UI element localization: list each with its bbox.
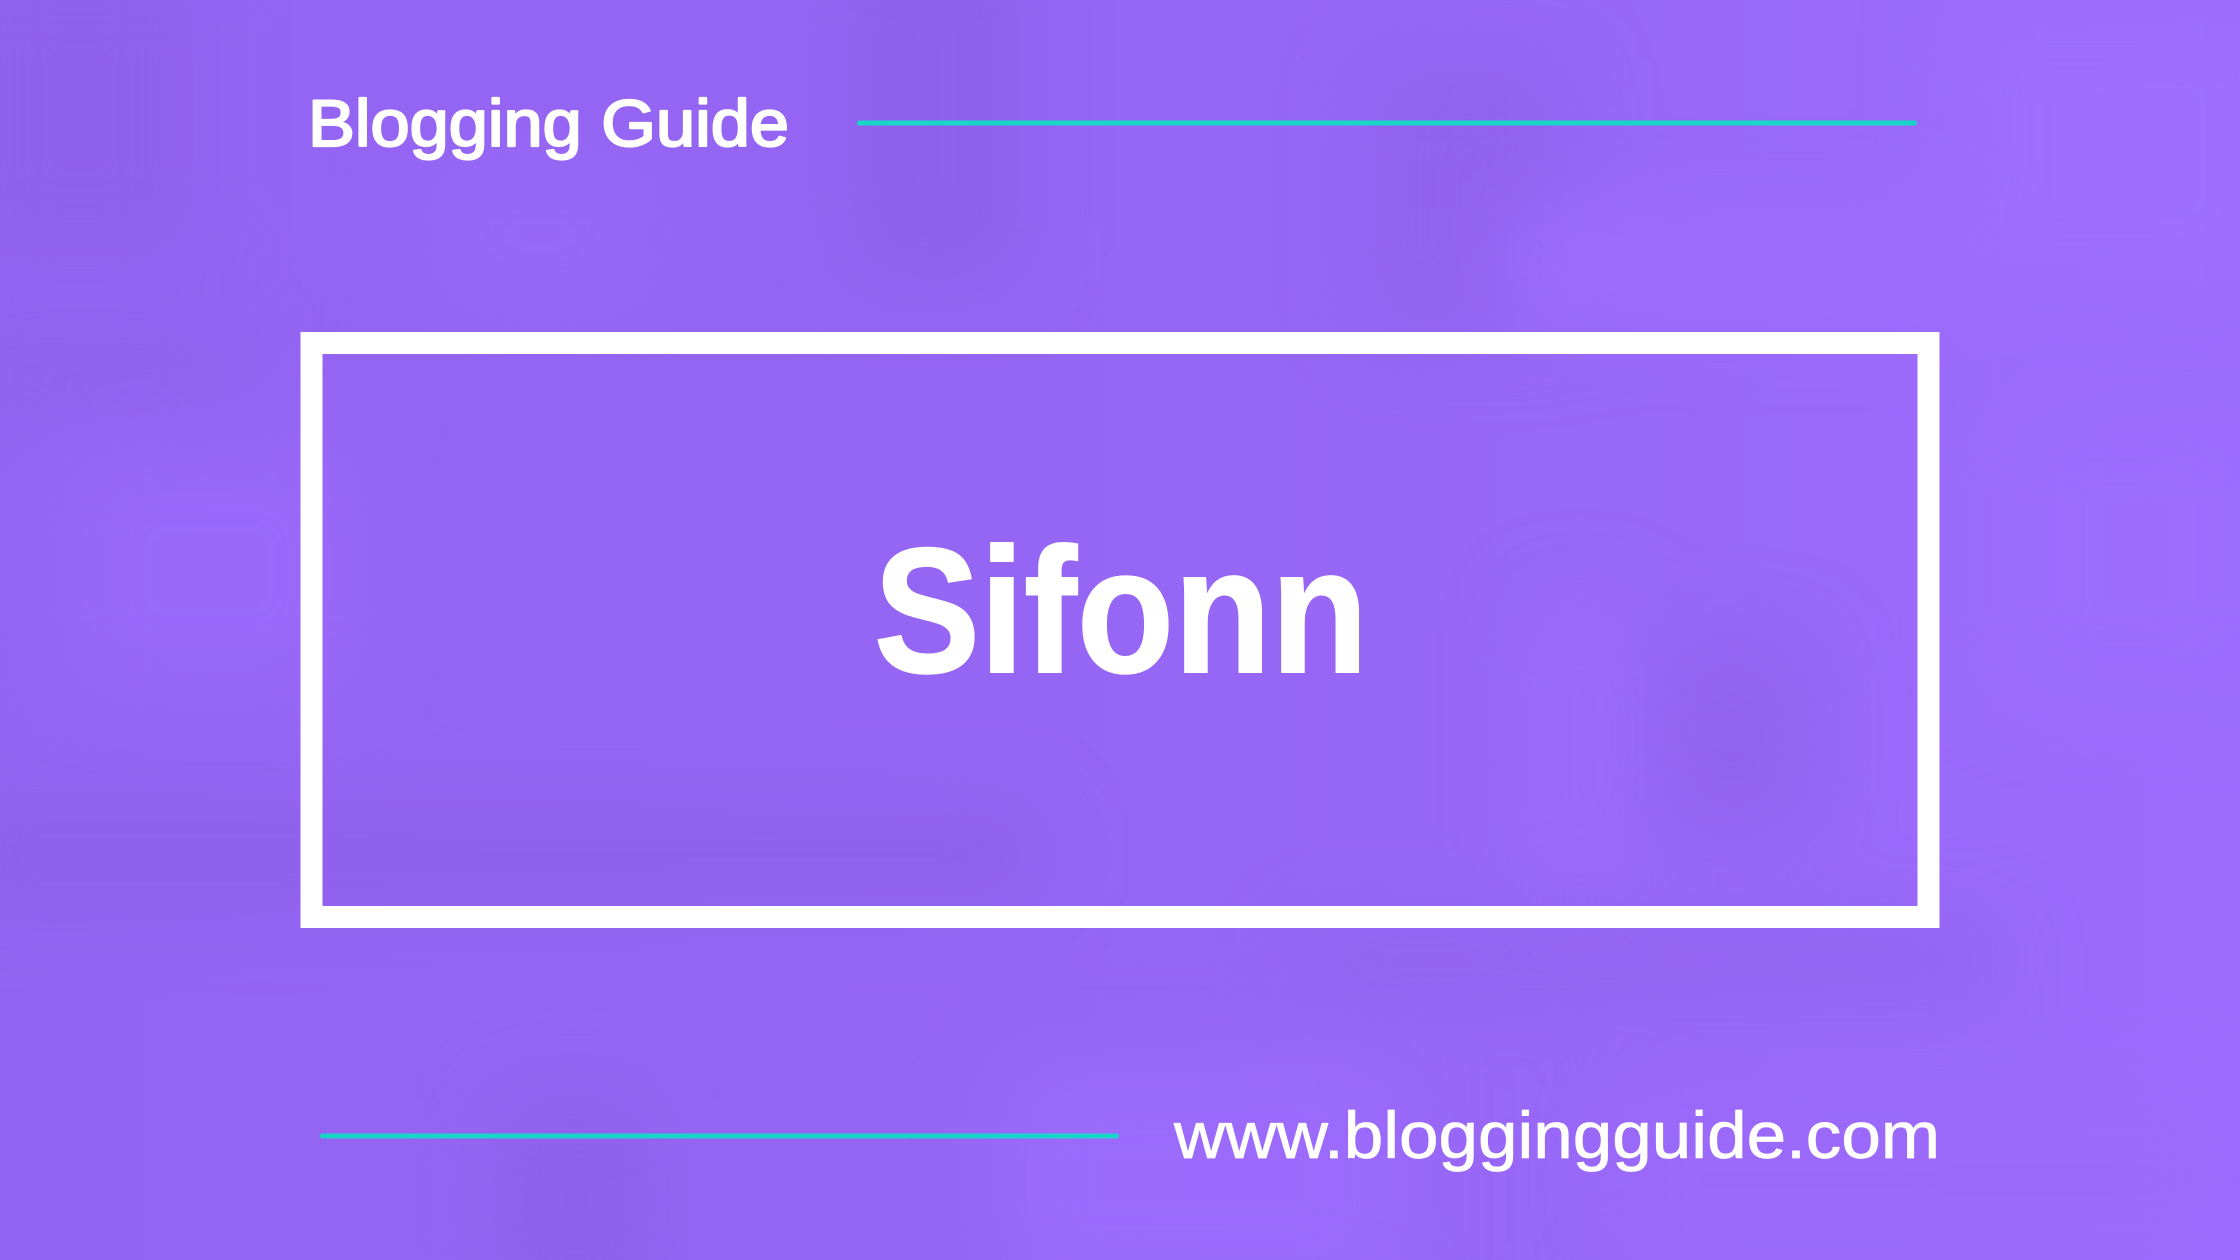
main title: Sifonn: Sifonn <box>874 511 1368 710</box>
website url: www.bloggingguide.com <box>1173 1098 1940 1172</box>
bottom accent line <box>320 1134 1119 1138</box>
white title frame <box>312 343 1928 917</box>
heading: Blogging Guide: Blogging Guide <box>308 86 789 160</box>
top accent line <box>857 120 1917 126</box>
